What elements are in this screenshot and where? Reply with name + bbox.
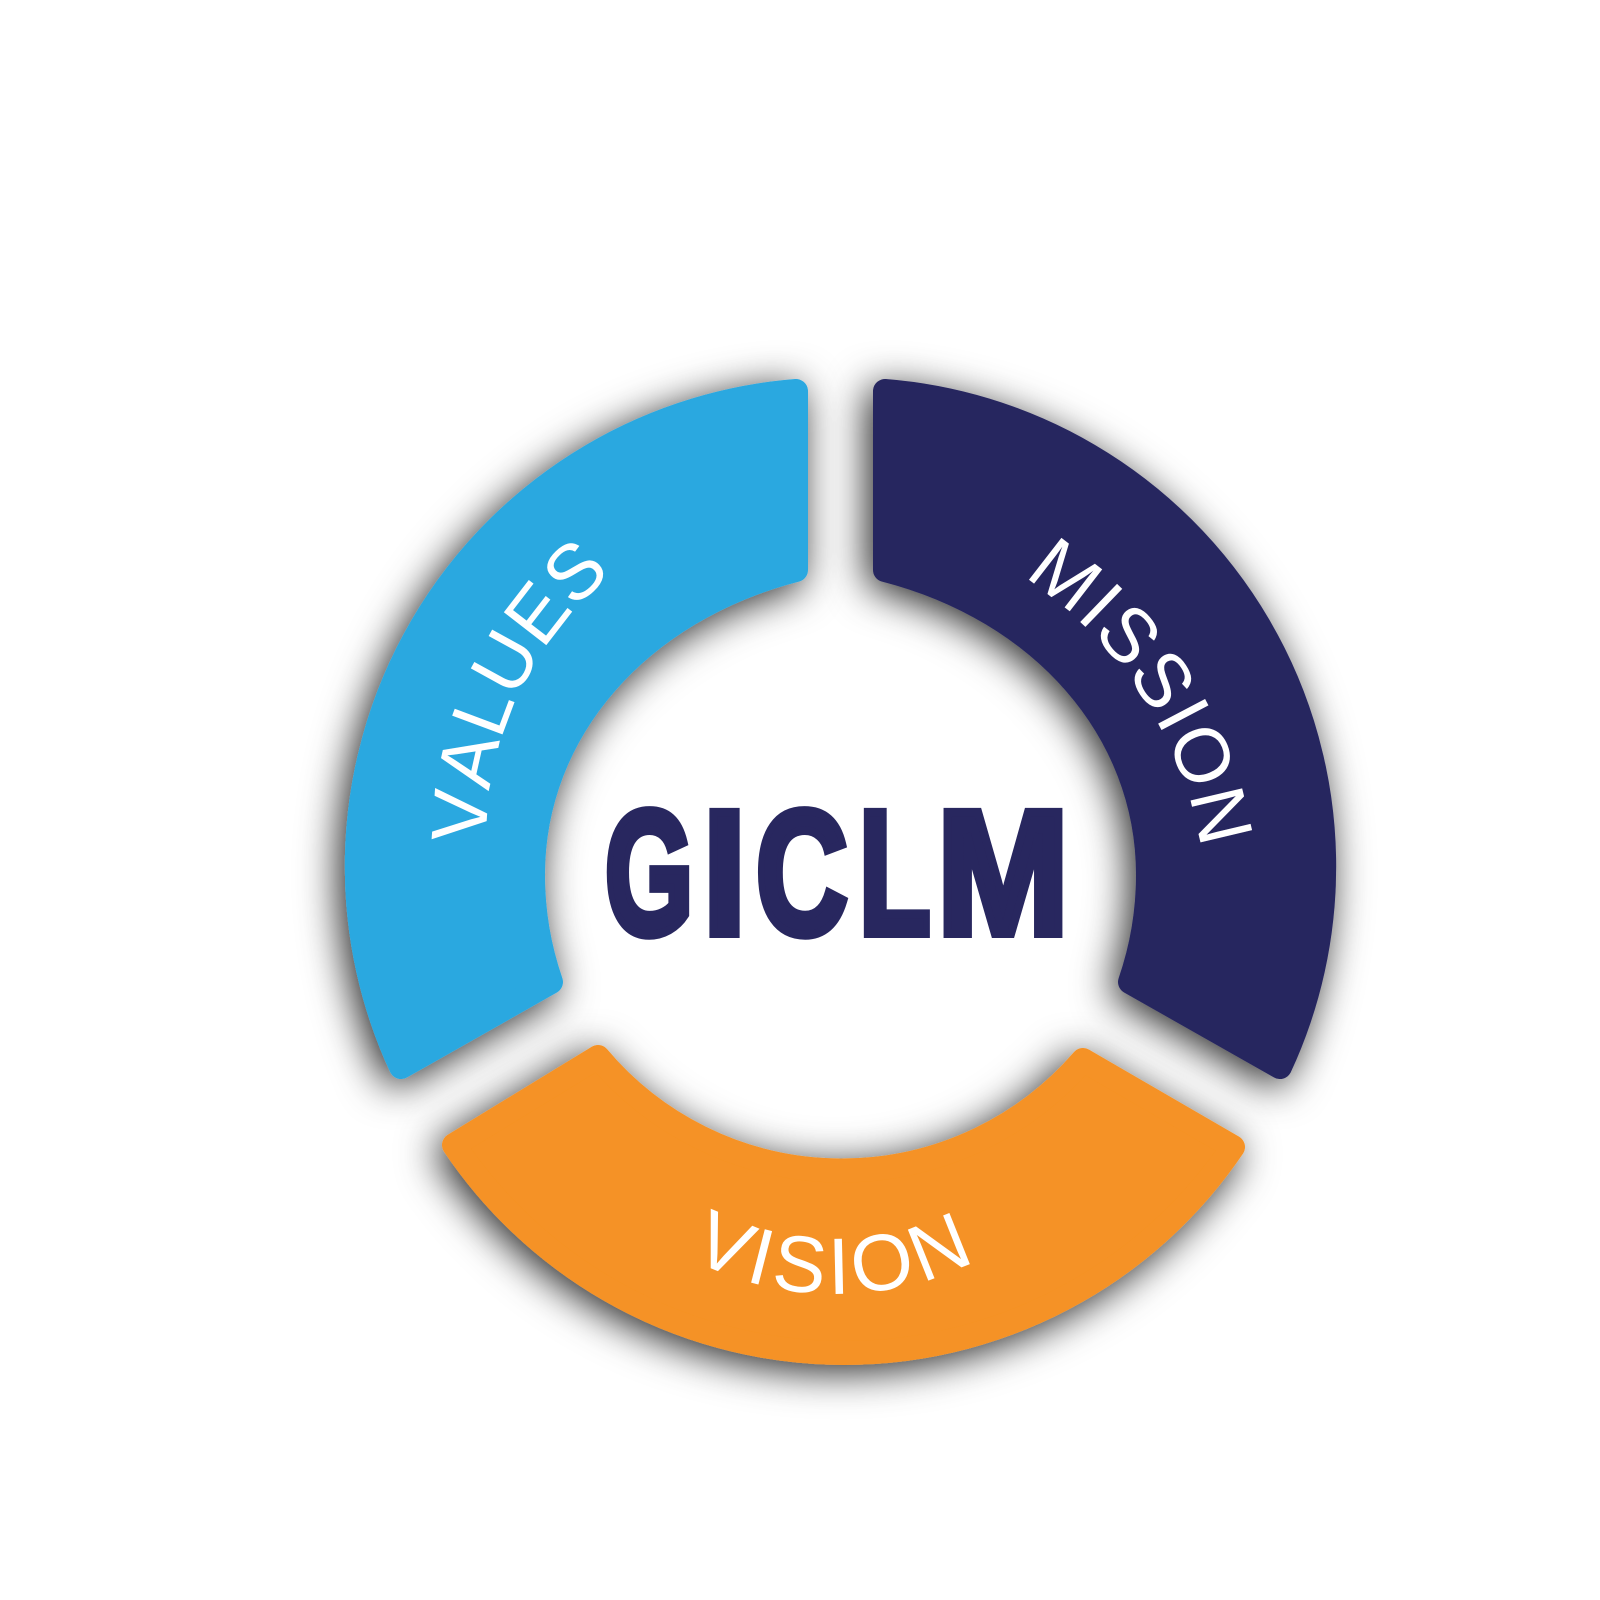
vision arc shape — [454, 1057, 1233, 1353]
title: GICLM: C — [756, 775, 848, 971]
mission label: MISSION — [1029, 538, 1252, 842]
panel: mission segment — [845, 356, 1364, 1108]
title: GICLM: L — [859, 775, 930, 971]
title: GICLM: G — [605, 775, 693, 972]
values arc shape — [357, 391, 796, 1067]
panel: values segment — [316, 356, 836, 1108]
title: GICLM: I — [703, 775, 746, 972]
values label: VALUES — [432, 543, 604, 840]
vision label: VISION — [710, 1208, 970, 1294]
mission arc shape — [885, 391, 1324, 1067]
title: GICLM: M — [937, 775, 1069, 971]
panel: vision segment — [414, 1025, 1266, 1393]
title: GICLM — [605, 775, 1069, 972]
